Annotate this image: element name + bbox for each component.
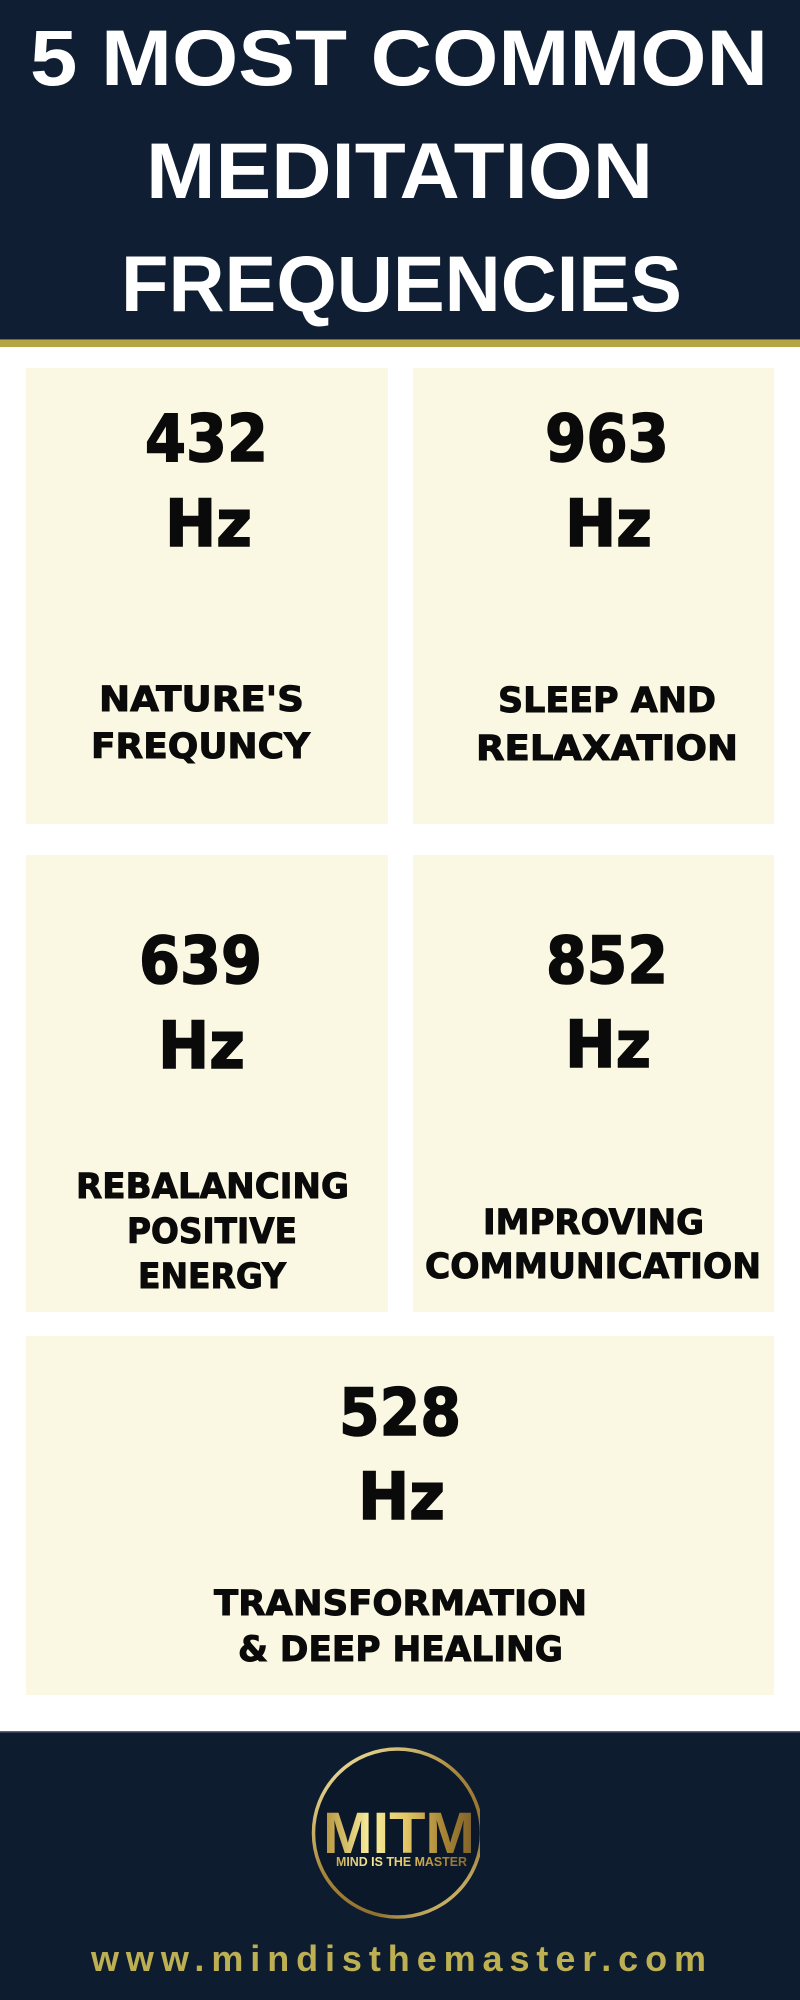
panel: 963 Hz: Hz — [565, 487, 652, 562]
panel: 432 Hz: FREQUNCY — [91, 727, 311, 767]
panel: 963 Hz: 963 — [545, 402, 669, 477]
panel: 528 Hz: 528 — [339, 1376, 461, 1451]
logo: MITM gold circle — [314, 1749, 482, 1917]
panel: 432 Hz: Hz — [165, 487, 252, 562]
header band — [0, 0, 800, 347]
panel: 639 Hz: ENERGY — [138, 1257, 287, 1297]
panel: 852 Hz: COMMUNICATION — [425, 1247, 761, 1287]
title: FREQUENCIES — [121, 239, 682, 328]
panel: 432 Hz — [26, 368, 388, 824]
panel: 963 Hz: RELAXATION — [476, 729, 738, 769]
panel: 528 Hz: TRANSFORMATION — [214, 1584, 587, 1624]
panel: 528 Hz: Hz — [358, 1460, 445, 1535]
panel: 639 Hz: 639 — [139, 924, 262, 999]
panel: 963 Hz — [413, 368, 774, 824]
panel: 639 Hz: REBALANCING — [76, 1167, 349, 1207]
title — [30, 13, 768, 328]
logo: MITM gold circle: MIND IS THE MASTER — [336, 1854, 468, 1869]
panel: 963 Hz: SLEEP AND — [498, 681, 716, 721]
footer band — [0, 1731, 800, 2000]
panel: 852 Hz: 852 — [546, 924, 668, 999]
panel: 432 Hz: 432 — [145, 402, 268, 477]
panel: 639 Hz: POSITIVE — [127, 1212, 297, 1252]
title: MEDITATION — [146, 126, 653, 215]
panel: 528 Hz: & DEEP HEALING — [238, 1630, 563, 1670]
panel: 639 Hz — [26, 855, 388, 1312]
panel: 852 Hz: IMPROVING — [483, 1203, 704, 1243]
logo: MITM gold circle: MITM — [323, 1801, 475, 1866]
panel: 528 Hz — [26, 1336, 774, 1695]
panel: 432 Hz: NATURE'S — [99, 680, 304, 720]
panel: 639 Hz: Hz — [158, 1009, 245, 1084]
title: 5 MOST COMMON — [30, 13, 768, 102]
panel: 852 Hz: Hz — [565, 1008, 651, 1083]
panel: 852 Hz — [413, 855, 774, 1312]
website url: www.mindisthemaster.com — [90, 1938, 706, 1979]
